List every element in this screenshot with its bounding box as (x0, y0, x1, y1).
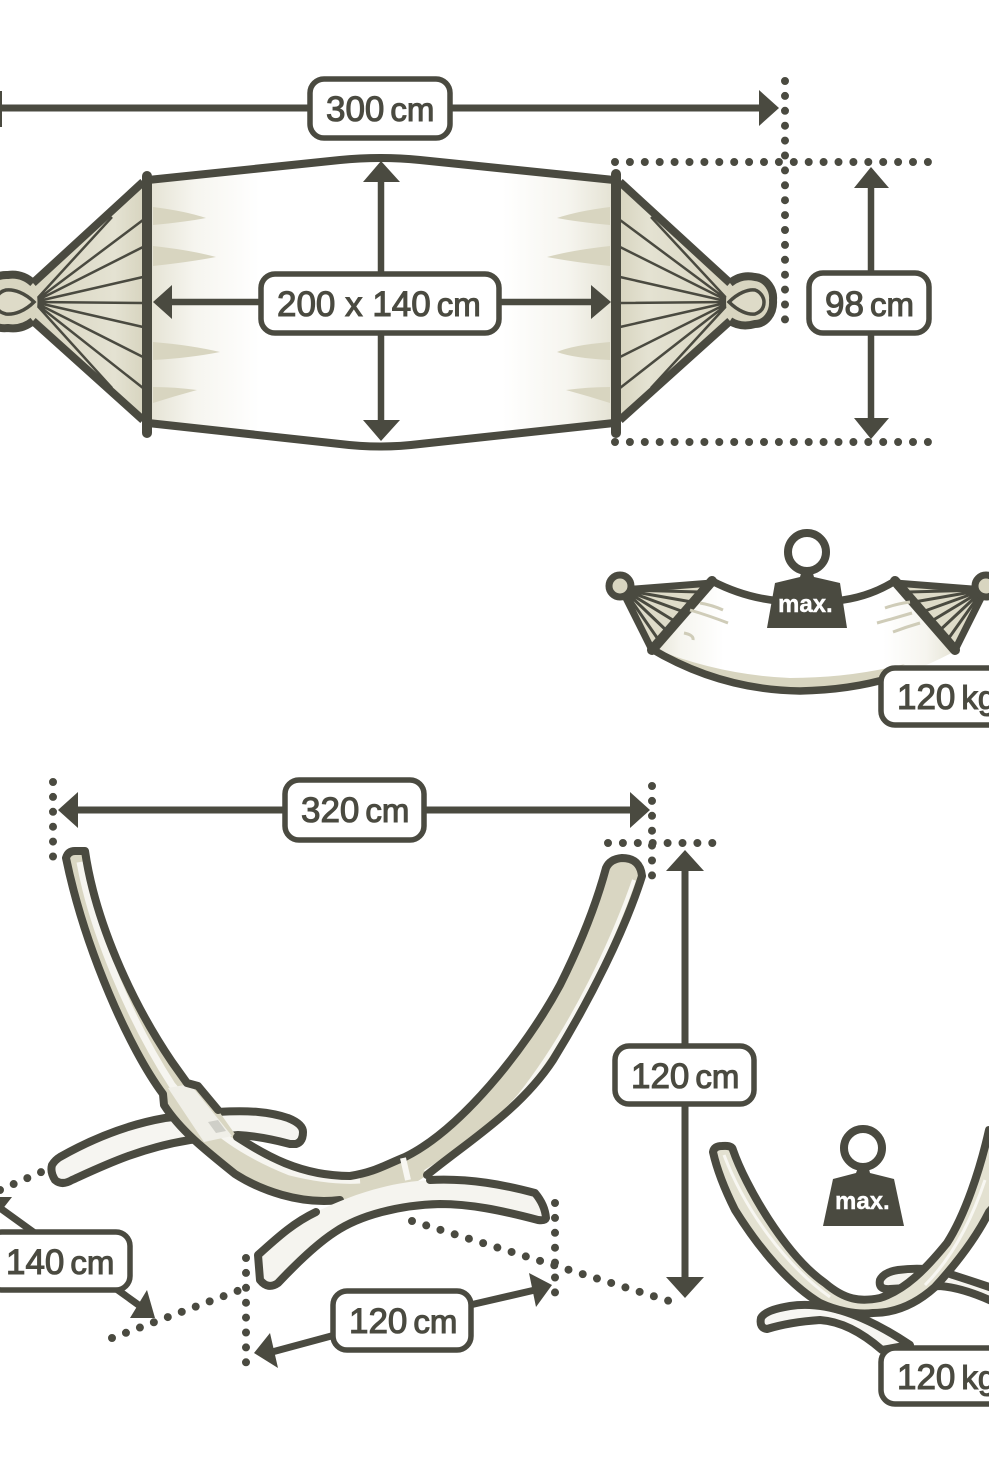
front base outline (258, 1180, 546, 1286)
label: 120 kg bottom (881, 1348, 989, 1404)
stand small (713, 1130, 989, 1350)
weight icon: max (767, 533, 847, 628)
hammock top view (0, 157, 775, 446)
left rope fan (0, 182, 143, 420)
loaded hammock cloth (650, 583, 957, 692)
label: 300 cm: 300cm (326, 90, 434, 129)
sag outline (650, 581, 895, 691)
arrow: 98 cm (854, 167, 889, 439)
left fan (622, 583, 712, 650)
arrows: 200 x 140 cm (153, 161, 611, 441)
label: 140 cm depth (0, 1232, 130, 1290)
arrow: 300 cm (0, 90, 779, 127)
arc sleeve (168, 1084, 232, 1142)
loaded hammock (609, 575, 989, 692)
label: 120 cm height: 120cm (631, 1057, 739, 1096)
right fan (895, 583, 985, 650)
small arc (713, 1130, 989, 1313)
fold marks (684, 602, 920, 640)
small arc highlight (724, 1155, 985, 1297)
label: 120 cm width: 120cm (349, 1302, 457, 1341)
dotted guides bottom (0, 782, 715, 1365)
arc outline (66, 851, 642, 1201)
label: 320 cm: 320cm (301, 791, 409, 830)
small front base (761, 1305, 910, 1350)
hanging rings (609, 575, 631, 597)
arrow: 140 cm depth (0, 1197, 155, 1318)
label: 300 cm (310, 79, 450, 138)
weight icon: max small: max. (835, 1188, 890, 1215)
front base fill (258, 1180, 546, 1286)
arrow: 120 cm width (254, 1273, 552, 1368)
label: 120 cm width (333, 1291, 471, 1350)
arrow: 320 cm (58, 792, 650, 828)
arc highlights (80, 862, 360, 1180)
label: 200 x 140 cm (261, 274, 499, 333)
label: 320 cm (285, 780, 424, 840)
right rope fan (620, 182, 775, 420)
spreader bars (147, 174, 616, 433)
label: 120 kg top (881, 668, 989, 725)
dotted guides top (615, 81, 932, 442)
label: 120 cm height (615, 1046, 754, 1104)
weight icon: max: max. (778, 591, 833, 618)
hammock edges (148, 158, 614, 446)
label: 98 cm: 98cm (825, 285, 914, 324)
weight icon: max small (823, 1129, 904, 1226)
stand large (51, 851, 642, 1286)
underside crescent (655, 649, 905, 692)
label: 200 x 140 cm: 200 x 140cm (277, 285, 481, 324)
cloth fold marks (153, 207, 610, 403)
label: 98 cm (809, 273, 929, 333)
small back base (880, 1269, 989, 1304)
main curved arc fill (66, 851, 642, 1201)
hammock cloth (148, 157, 614, 446)
arc joint (403, 1158, 408, 1180)
arrow: 120 cm height (666, 850, 704, 1298)
label: 140 cm depth: 140cm (6, 1243, 114, 1282)
back base (51, 1111, 303, 1183)
